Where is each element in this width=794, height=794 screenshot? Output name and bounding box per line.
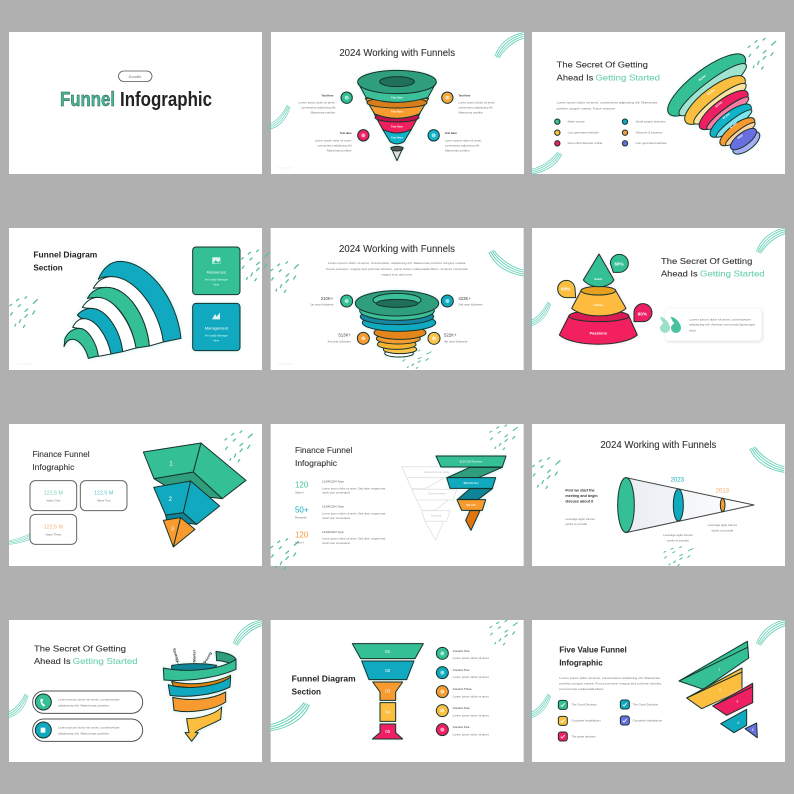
stat 50+ blue: [295, 505, 385, 520]
slide 6: pyramid: [530, 228, 785, 370]
stat box two: [80, 481, 127, 511]
item three: Content Three: [453, 687, 472, 691]
pyramid labels: Lifeline: [594, 303, 603, 307]
callout top right: Text Here: [458, 93, 471, 97]
stat 210K: 1st year followers: [310, 303, 334, 307]
green ellipse: [618, 478, 634, 532]
callout top right: Maecenas porttitor: [458, 111, 483, 115]
tier 01: 01: [385, 649, 391, 654]
colored funnel: [436, 456, 506, 530]
caption right: [708, 523, 738, 532]
stat 210K: 210K+: [321, 296, 334, 301]
drop 60%: [610, 254, 628, 272]
left text: meeting and begin: [565, 494, 598, 498]
title: Infographic: [120, 89, 212, 111]
checklist: Complete Installations: [633, 718, 663, 722]
stat 513K: [327, 332, 369, 344]
card: resources: Resources: [207, 270, 226, 275]
title: [295, 445, 352, 468]
cone: [618, 478, 754, 533]
card: management: Are totally Manager: [205, 333, 228, 337]
card: management: [193, 303, 240, 351]
callout top left: Text Here: [321, 93, 334, 97]
tier 03: 03: [385, 688, 391, 693]
stat 50+ blue: Lorem ipsum dolor sit amet. Sed diam magna erat: [322, 512, 385, 516]
slanted funnel pieces: 3: [736, 700, 738, 704]
legend: Lion generated website: [636, 141, 667, 145]
card: resources: Here: [213, 283, 220, 287]
callout bottom left: consectetur adipiscing elit: [317, 143, 352, 147]
body text: porttitor congue massa. Fusce posuere, magna sed pulvinar ultricies,: [559, 682, 662, 686]
title: Funnel: [60, 89, 115, 111]
slide 12: five value funnel: [530, 620, 785, 762]
ghost labels: Content Here Level: [424, 470, 450, 474]
pyramid labels: [590, 277, 608, 336]
title: [557, 60, 660, 82]
slide 4: nested arcs: [9, 228, 269, 370]
item four: Lorem ipsum dolor sit amet: [453, 713, 489, 717]
legend: Lion generated website: [568, 130, 599, 134]
title: Funnel Diagram: [33, 250, 98, 260]
stat 50+ blue: Rewards: [295, 515, 307, 519]
drop 90%: 90%: [638, 311, 648, 316]
title: 2024 Working with Funnels: [339, 244, 455, 255]
title: [559, 645, 627, 668]
item five: Content Five: [453, 725, 470, 729]
arcs diagram: [64, 261, 181, 358]
stat 120 teal: Sales I: [295, 490, 304, 494]
funnel labels: Text Here: [391, 110, 403, 114]
body text: Fusce posuere, magna sed pulvinar ultricies, purus lectus malesuada libero, sit amet commodo: [326, 267, 468, 271]
checklist: The Good Decision: [571, 703, 597, 707]
quote card: [660, 308, 762, 341]
spiral labels: Strategy: [172, 648, 180, 664]
stat 120 orange: 11/04/2024 Type: [322, 530, 344, 534]
callout bottom right: consectetur adipiscing elit: [445, 143, 479, 147]
legend: Make money: [568, 119, 585, 123]
ghost labels: Content Here: [428, 492, 446, 496]
body text: Lorem ipsum dolor sit amet, consectetuer adipiscing elit. Maecenas: [559, 676, 661, 680]
tier 02: 02: [385, 668, 391, 673]
tier 04: 04: [385, 709, 391, 714]
title: The Secret Of Getting: [661, 256, 753, 266]
body text: porttitor congue massa. Fusce posuere: [557, 107, 615, 111]
left text: [565, 488, 598, 526]
body text: [326, 261, 468, 276]
callout top left: consectetur adipiscing elit: [301, 106, 335, 110]
stat 50+ blue: 50+: [295, 506, 309, 515]
stat 120 orange: Sales I: [295, 541, 304, 545]
ghost labels: [424, 470, 450, 518]
slanted funnel pieces: 1: [718, 667, 720, 671]
item three: [436, 686, 489, 698]
slide 1: cover: [9, 32, 262, 174]
funnel numbers: 3: [171, 526, 174, 532]
drop 90%: [634, 304, 652, 322]
stat 513K: 513K+: [338, 333, 351, 338]
3D funnel: [143, 443, 246, 547]
stat box two: Value Two: [97, 499, 111, 503]
callout top right: [442, 92, 495, 115]
body text: [557, 101, 658, 111]
title: Ahead Is: [661, 269, 698, 279]
slide 11: funnel diagram 01-05: [271, 620, 524, 762]
item three: Lorem ipsum dolor sit amet: [453, 694, 489, 698]
item two: [436, 667, 489, 679]
stat box two: 122,5 M: [94, 491, 113, 497]
stat 120 orange: 120: [295, 531, 309, 540]
item five: [436, 724, 489, 736]
slanted funnel pieces: 4: [737, 721, 739, 725]
spiral labels: Pricing: [203, 651, 213, 664]
pyramid: [559, 254, 637, 344]
slide 3: tilted funnel: [532, 32, 785, 174]
stat 120 teal: Lorem ipsum dolor sit amet. Sed diam magna erat: [322, 486, 385, 490]
left text: works to provide: [565, 522, 587, 526]
item five: Lorem ipsum dolor sit amet: [453, 732, 489, 736]
spiral labels: [172, 648, 213, 664]
body text: Lorem ipsum dolor sit amet, Consectetur, adipiscing elit. Maecenas porttitor congue massa.: [328, 261, 466, 265]
slide 7: finance 3D funnel: [9, 424, 262, 566]
stat 120 orange: Lorem ipsum dolor sit amet. Sed diam magna erat: [322, 537, 385, 541]
stat box one: Value One: [46, 499, 61, 503]
pill label: [118, 71, 152, 82]
disc labels: $500: [736, 133, 744, 140]
funnel labels: Text Here: [391, 135, 403, 139]
stat 120 teal: nostri quo consequat.: [322, 491, 351, 495]
caption right: works to provide: [711, 528, 734, 532]
body text: Lorem ipsum dolor sit amet, consectetur adipiscing elit. Maecenas: [557, 101, 658, 105]
funnel tiers: [352, 644, 423, 739]
title: Getting Started: [73, 656, 138, 666]
stat 210K: [310, 295, 353, 307]
left text: Leverage agile frames: [565, 517, 595, 521]
callout top left: Lorem ipsum dolor sit amet,: [299, 101, 335, 105]
orange ellipse: [720, 498, 725, 512]
title: [34, 643, 138, 666]
slide 2: funnel with four callouts: [270, 32, 524, 174]
callout bottom right: Maecenas porttitor: [445, 148, 470, 152]
card: management: Here: [213, 338, 220, 342]
card: resources: Are totally Manager: [205, 278, 228, 282]
pyramid labels: Reach: [594, 277, 603, 281]
title: Section: [33, 263, 63, 273]
stat 522K: 4th year followers: [444, 339, 468, 343]
callout bottom right: Text Here: [445, 131, 457, 135]
title: Funnel Diagram: [292, 674, 356, 684]
caption right: Leverage agile frames: [708, 523, 738, 527]
funnel: [358, 70, 436, 161]
caption mid: [663, 533, 693, 542]
drop 80%: 80%: [561, 287, 571, 292]
funnel labels: Text Here: [391, 124, 403, 128]
title: [33, 250, 98, 273]
stat box three: [30, 514, 77, 544]
disc labels: $1,000: [729, 121, 738, 129]
checklist: [558, 700, 663, 741]
legend: Keep client Escape profile: [568, 141, 603, 145]
callout top left: [299, 92, 352, 115]
title: The Secret Of Getting: [557, 60, 648, 70]
tier 05: 05: [385, 729, 391, 734]
item two: Content Two: [453, 668, 470, 672]
slide 10: spiral funnel: [8, 620, 262, 762]
title: Infographic: [559, 658, 603, 668]
slide 5: ring funnel: Funnel Infographic: [278, 363, 294, 366]
colored funnel labels: $120,000 Revenue: [460, 459, 483, 463]
left text: First we start the: [565, 488, 595, 492]
slide 9: horizontal cone: [532, 424, 785, 566]
colored funnel labels: $80,000 Rev: [463, 481, 479, 485]
pill one: adipiscing elit. Maecenas porttitor: [58, 704, 109, 708]
title: Finance Funnel: [32, 449, 90, 459]
quote card: adipiscing elit. Aenean commodo ligula eget: [689, 323, 755, 327]
funnel labels: [391, 96, 403, 139]
colored funnel labels: [460, 459, 483, 507]
stat 120 orange: nostri quo consequat.: [322, 541, 351, 545]
slide 2: funnel with four callouts: Funnel Infographic: [277, 167, 293, 170]
spiral ribbon: [163, 651, 236, 741]
slanted funnel pieces: [679, 641, 757, 738]
stat box one: 122,5 M: [44, 491, 63, 497]
stat 423K: 2nd year followers: [458, 303, 483, 307]
ghost labels: Content: [431, 514, 441, 518]
title: [60, 89, 212, 111]
slide 4: nested arcs: Funnel Infographic: [17, 363, 33, 366]
title: [292, 674, 356, 697]
callout bottom right: [428, 130, 482, 152]
title: Section: [292, 687, 321, 697]
item one: Content One: [453, 649, 470, 653]
stat 50+ blue: nostri quo consequat.: [322, 516, 351, 520]
drop 60%: 60%: [614, 261, 625, 266]
disc labels: $5,000: [698, 74, 707, 82]
slanted funnel pieces: 5: [752, 728, 754, 732]
pyramid labels: Passions: [590, 331, 608, 336]
body text: magna eros quis urna.: [381, 272, 413, 276]
pill two: Lorem ipsum dolor sit amet, consectetuer: [58, 726, 120, 730]
title: Ahead Is: [557, 72, 594, 82]
funnel labels: Text Here: [391, 96, 403, 100]
title: [32, 449, 90, 472]
quote card: dolor.: [689, 328, 697, 332]
callout top right: consectetur adipiscing elit: [458, 106, 493, 110]
title: Five Value Funnel: [559, 645, 627, 655]
callout bottom left: Maecenas porttitor: [327, 148, 352, 152]
callout bottom left: Lorem ipsum dolor sit amet,: [315, 138, 352, 142]
card: management: Management: [205, 326, 229, 331]
checklist: Complete Installations: [571, 719, 601, 723]
stat 522K: [428, 332, 468, 344]
tilted funnel discs: [660, 44, 763, 158]
checklist: The great decision: [571, 734, 596, 738]
title: Ahead Is: [34, 656, 71, 666]
body text: purus lectus malesuada libero.: [559, 687, 605, 691]
title: Infographic: [32, 462, 75, 472]
pill two: adipiscing elit. Maecenas porttitor: [58, 732, 109, 736]
caption mid: works to provide: [667, 538, 689, 542]
slanted funnel pieces: 2: [719, 688, 721, 692]
item one: Lorem ipsum dolor sit amet: [453, 656, 489, 660]
year 2023: 2023: [671, 478, 685, 484]
legend: Small project business: [636, 119, 666, 123]
caption mid: Leverage agile frames: [663, 533, 693, 537]
pill two: [33, 719, 143, 741]
callout bottom left: Text Here: [340, 131, 352, 135]
disc labels: $4,000: [707, 88, 716, 96]
left text: discuss about it: [565, 500, 594, 504]
ring funnel: [355, 291, 439, 357]
drop 80%: [558, 280, 576, 298]
disc labels: $3,000: [714, 100, 724, 108]
checklist: The Good Decision: [633, 702, 659, 706]
funnel numbers: 1: [169, 461, 173, 467]
stat 423K: [441, 295, 483, 307]
funnel numbers: [169, 461, 174, 532]
stat 423K: 423K+: [458, 296, 471, 301]
item one: [436, 647, 489, 660]
callout bottom left: [315, 130, 369, 152]
stat 120 orange: [295, 530, 385, 545]
callout top right: Lorem ipsum dolor sit amet,: [458, 101, 495, 105]
funnel numbers: 2: [169, 497, 173, 503]
stat 120 teal: 11/04/2024 Type: [322, 480, 344, 484]
title: Getting Started: [700, 269, 765, 279]
colored funnel labels: $50,000: [466, 503, 476, 507]
item two: Lorem ipsum dolor sit amet: [453, 675, 489, 679]
blue ellipse: [673, 489, 683, 521]
stat 120 teal: [295, 480, 385, 495]
stat box three: 122,5 M: [44, 524, 63, 530]
stat 50+ blue: 11/04/2024 Type: [322, 505, 344, 509]
title: [661, 256, 765, 279]
pill label: Doodle: [129, 74, 142, 79]
slide 8: finance stepped funnel: [271, 424, 524, 569]
disc labels: $2,000: [722, 112, 731, 120]
stat 522K: 522K+: [444, 333, 457, 338]
callout top left: Maecenas porttitor: [311, 111, 335, 115]
stat box three: Value Three: [45, 532, 62, 536]
item four: Content Four: [453, 706, 470, 710]
disc labels: [698, 74, 744, 140]
stat box one: [30, 481, 77, 511]
stat 120 teal: 120: [295, 480, 309, 489]
title: Getting Started: [595, 72, 660, 82]
title: The Secret Of Getting: [34, 643, 126, 653]
slide 5: ring funnel: [271, 228, 524, 370]
title: 2024 Working with Funnels: [600, 440, 716, 451]
stat 513K: 3rd year followers: [327, 339, 351, 343]
title: Finance Funnel: [295, 445, 352, 455]
quote card: Lorem ipsum dolor sit amet, consectetuer: [689, 317, 751, 321]
legend: Discount & expense: [636, 130, 663, 134]
year 2013: 2013: [716, 488, 730, 494]
spiral labels: Market: [193, 649, 197, 662]
pill one: Lorem ipsum dolor sit amet, consectetuer: [58, 698, 120, 702]
callout bottom right: Lorem ipsum dolor sit amet,: [445, 138, 482, 142]
body text: [559, 676, 662, 691]
item four: [436, 705, 489, 717]
legend: [555, 119, 667, 146]
card: resources: [193, 247, 240, 295]
ghost funnel: [402, 467, 472, 540]
title: 2024 Working with Funnels: [339, 48, 455, 59]
title: Infographic: [295, 458, 338, 468]
pill one: [33, 691, 143, 713]
